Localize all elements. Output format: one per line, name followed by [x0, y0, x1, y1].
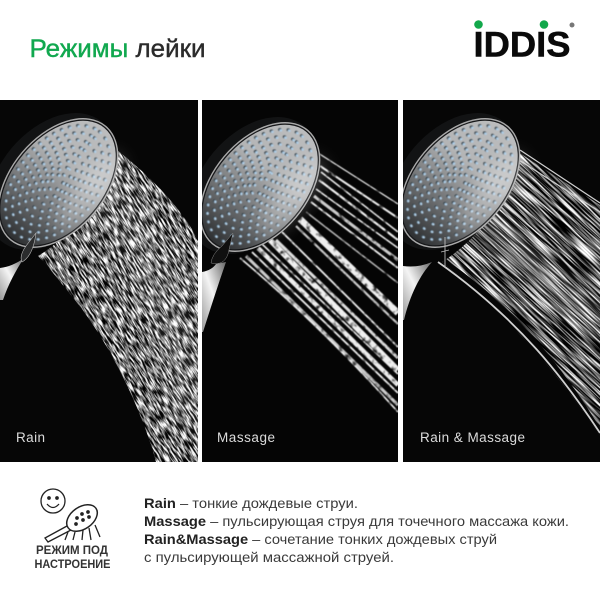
- shower head: rain: [0, 113, 130, 250]
- label: Massage: Massage: [217, 430, 275, 445]
- description text: [144, 495, 569, 565]
- lever: rain and massage: [441, 237, 449, 268]
- panel: Rain & Massage: [403, 100, 600, 462]
- lever: massage: [211, 233, 233, 264]
- label: Rain & Massage: Rain & Massage: [420, 430, 525, 445]
- title: Режимы лейки: [30, 35, 206, 63]
- description text: Rain – тонкие дождевые струи.: [144, 495, 358, 511]
- label: Rain: Rain: [16, 430, 45, 445]
- water: rain: [38, 151, 198, 462]
- handle: rain: [0, 260, 22, 300]
- logo: IDDIS: IDDIS: [474, 26, 570, 64]
- icon: shower head: [45, 499, 102, 542]
- description text: Rain&Massage – сочетание тонких дождевых струй: [144, 531, 497, 547]
- water: massage jets: [240, 153, 398, 412]
- handle: rain and massage: [403, 262, 432, 320]
- shower head: massage: [202, 117, 332, 254]
- outer jets: [438, 150, 600, 433]
- panel: Rain: [0, 100, 198, 462]
- icon: smiley: [41, 489, 65, 513]
- lever: rain: [21, 233, 36, 262]
- panel: Massage: [202, 100, 398, 462]
- icon caption: РЕЖИМ ПОД: [36, 545, 108, 557]
- description text: с пульсирующей массажной струей.: [144, 549, 394, 565]
- text: НАСТРОЕНИЕ: [34, 559, 111, 571]
- handle: massage: [202, 262, 226, 332]
- shower head: rain and massage: [403, 113, 532, 250]
- icon: mood shower: [41, 489, 102, 542]
- description text: Massage – пульсирующая струя для точечного массажа кожи.: [144, 513, 569, 529]
- water: rain and massage: [442, 154, 600, 436]
